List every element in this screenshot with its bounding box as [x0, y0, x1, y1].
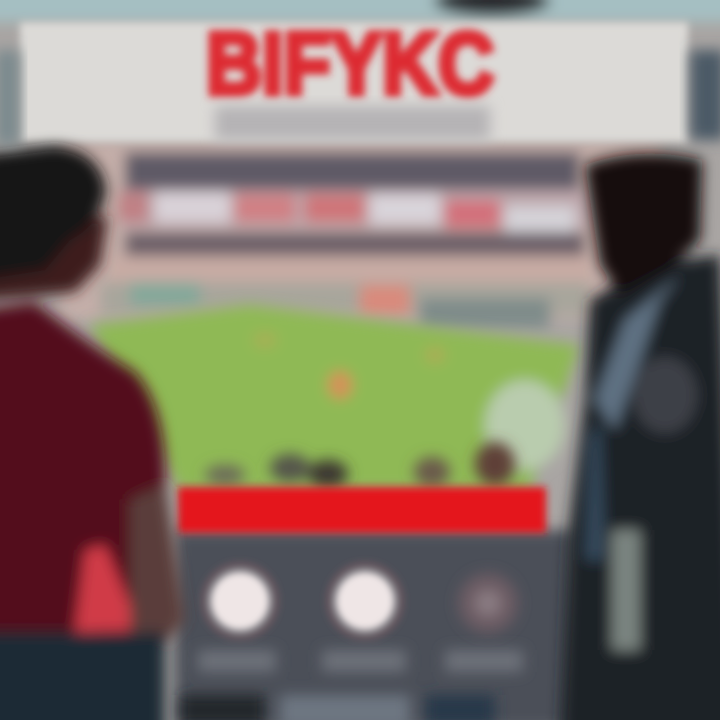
banner background — [20, 22, 688, 142]
red banner — [178, 487, 546, 533]
sky strip and top silhouette — [0, 0, 720, 22]
person right — [560, 154, 720, 720]
person left — [0, 146, 185, 720]
football pitch — [90, 305, 580, 490]
stadium stands — [60, 140, 660, 328]
icon: circle 3 — [458, 573, 518, 633]
column captions — [180, 650, 523, 720]
title: BIFYKC — [206, 14, 494, 113]
banner with title — [20, 14, 688, 142]
icon: circle 2 — [329, 565, 401, 637]
icon: circle 1 — [204, 565, 276, 637]
right edge stadium detail — [690, 50, 720, 140]
left edge stadium detail — [0, 50, 20, 145]
subtitle — [215, 106, 490, 140]
lower dark panel — [175, 530, 575, 720]
crowd heads — [205, 442, 515, 488]
